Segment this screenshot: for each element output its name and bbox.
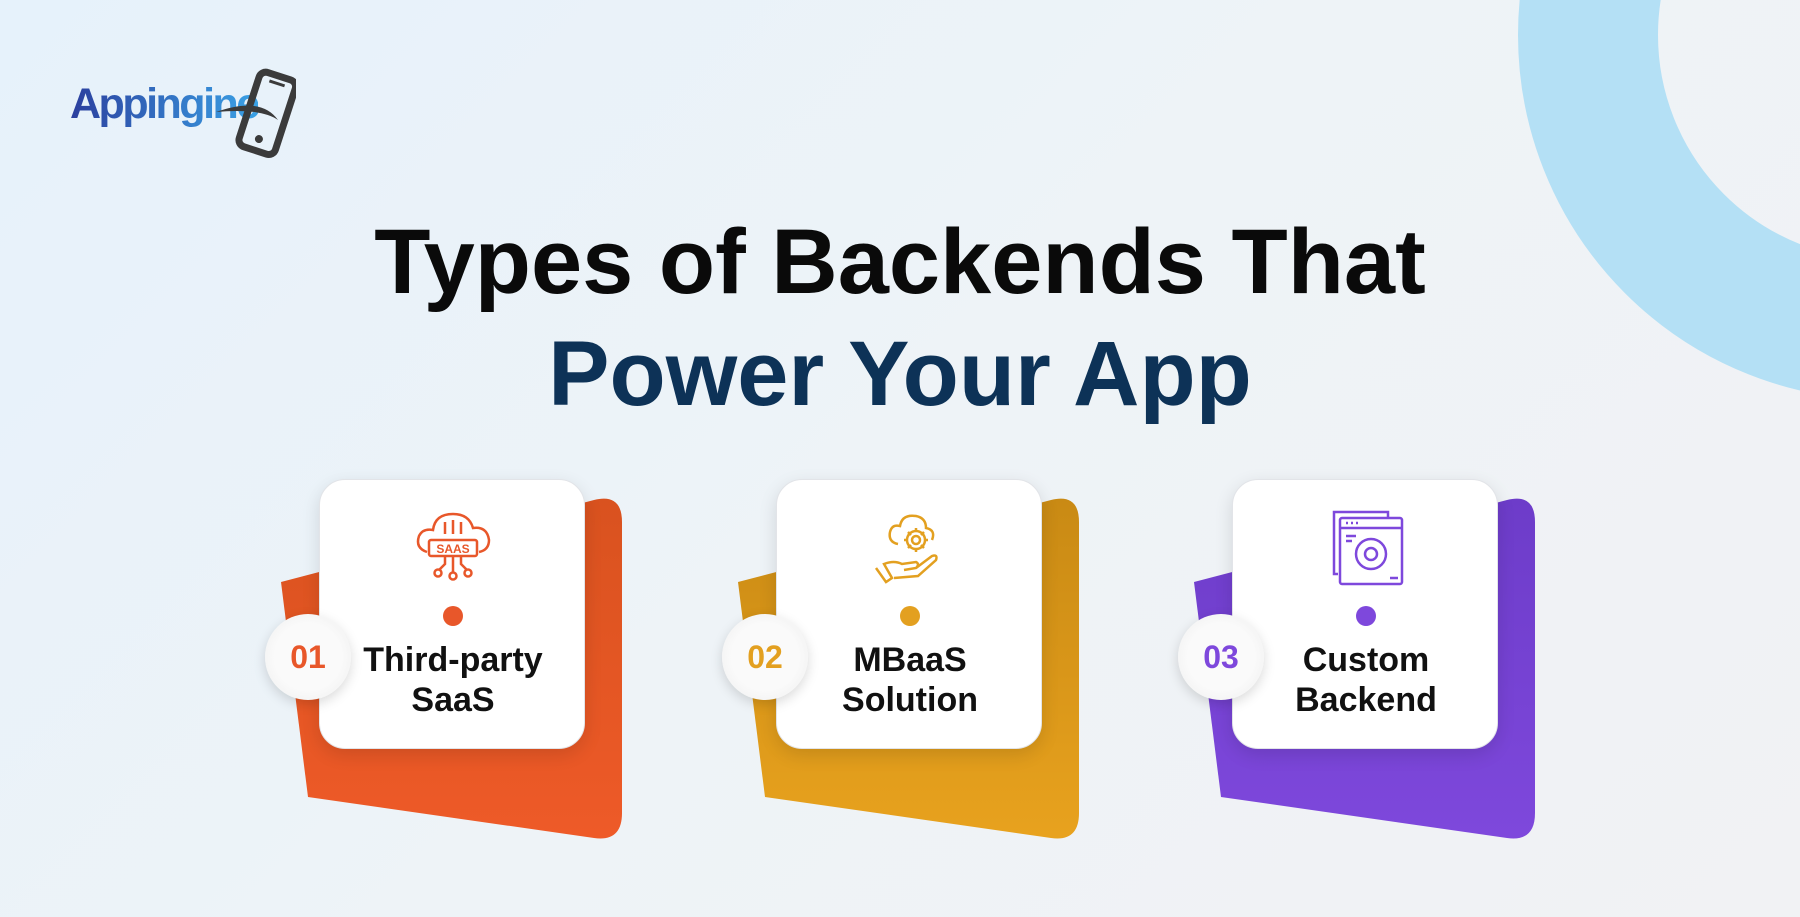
logo (70, 68, 296, 158)
title: Power Your App (548, 323, 1252, 425)
label: SaaS (411, 681, 495, 719)
label (1295, 641, 1437, 719)
icon: saas cloud (416, 512, 490, 581)
number 03 (1178, 614, 1264, 700)
label: Solution (842, 681, 978, 719)
dot (900, 606, 920, 626)
icon: windows gear (1332, 510, 1404, 586)
label: Third-party (363, 641, 543, 679)
icon: saas cloud: SAAS (436, 542, 470, 556)
label (842, 641, 978, 719)
label: Backend (1295, 681, 1437, 719)
number 02: 02 (747, 639, 783, 675)
panel: card 1 (319, 479, 585, 749)
title (374, 211, 1426, 425)
logo: Appingine (70, 80, 258, 128)
back shape 3 (1194, 499, 1535, 838)
dot (1356, 606, 1376, 626)
number 01: 01 (290, 639, 326, 675)
back shape 1 (281, 499, 622, 838)
number 02 (722, 614, 808, 700)
number 01 (265, 614, 351, 700)
title: Types of Backends That (374, 211, 1426, 313)
back shape 2 (738, 499, 1079, 838)
label: Custom (1303, 641, 1429, 679)
label (363, 641, 543, 719)
icon: phone (216, 68, 296, 158)
number 03: 03 (1203, 639, 1239, 675)
panel: card 2 (776, 479, 1042, 749)
label: MBaaS (853, 641, 967, 679)
dot (443, 606, 463, 626)
icon: hand cloud gear (875, 514, 938, 584)
panel: card 3 (1232, 479, 1498, 749)
